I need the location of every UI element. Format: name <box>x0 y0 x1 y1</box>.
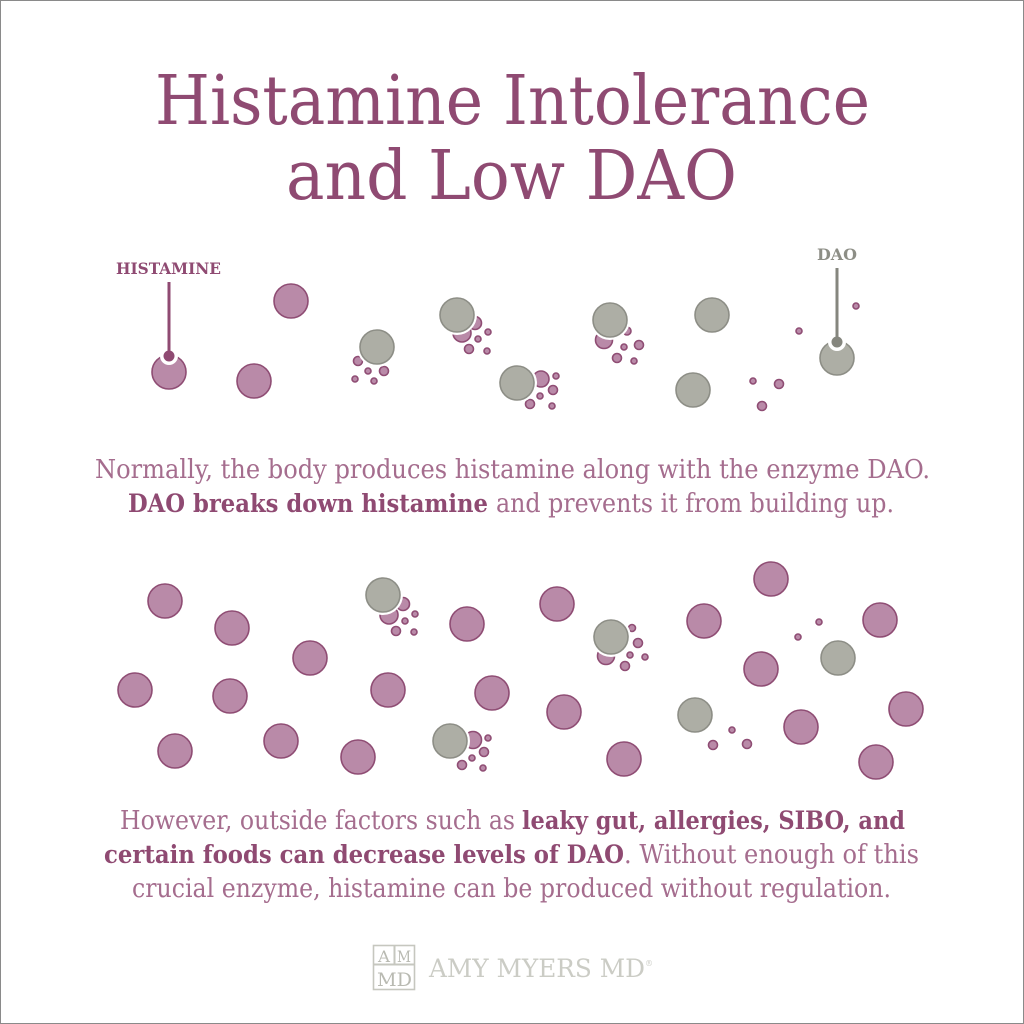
DAO molecules and histamine fragments <box>678 619 855 750</box>
DAO breaking down histamine 2 <box>437 295 491 354</box>
text block: normal DAO function: and prevents it from building up. <box>496 489 894 519</box>
histamine molecules <box>237 284 308 398</box>
logo mark: MD <box>377 969 412 991</box>
diagram: normal histamine and DAO levels <box>116 245 859 410</box>
text block: outside factors <box>104 806 919 904</box>
text block: outside factors: leaky gut, allergies, SIBO, and <box>522 806 905 835</box>
DAO breaking down histamine 2 <box>591 617 648 670</box>
label: DAO pointer <box>817 245 857 375</box>
DAO breaking down histamine 4 <box>590 300 644 364</box>
DAO breaking down histamine 1 <box>352 327 397 384</box>
DAO breaking down histamine 3 <box>430 721 491 771</box>
text block: outside factors: certain foods can decrease levels of DAO <box>104 840 624 869</box>
label: DAO pointer: DAO <box>817 245 857 264</box>
text block: outside factors: . Without enough of this <box>624 840 919 870</box>
logo wordmark: AMY MYERS MD <box>428 954 645 983</box>
title <box>155 62 870 216</box>
text block: outside factors: crucial enzyme, histamine can be produced without regulation. <box>132 874 891 904</box>
title: and Low DAO <box>286 137 737 216</box>
diagram: low DAO and histamine build-up <box>118 562 923 779</box>
DAO breaking down histamine 3 <box>497 363 559 409</box>
text block: normal DAO function <box>95 455 930 519</box>
text block: normal DAO function: Normally, the body produces histamine along with the enzyme DAO. <box>95 455 930 485</box>
DAO breaking down histamine 1 <box>363 575 418 636</box>
text block: outside factors: However, outside factors such as <box>120 806 515 836</box>
histamine molecules <box>118 562 923 779</box>
label: histamine pointer <box>116 259 221 389</box>
DAO molecules and histamine fragments <box>676 298 859 410</box>
logo mark: A <box>377 947 390 966</box>
text block: normal DAO function: DAO breaks down histamine <box>128 489 488 518</box>
logo mark: M <box>397 947 411 966</box>
label: histamine pointer: HISTAMINE <box>116 259 221 278</box>
logo mark <box>374 946 414 991</box>
logo: Amy Myers MD <box>374 946 653 991</box>
title: Histamine Intolerance <box>155 62 870 141</box>
registered mark: ® <box>645 959 653 968</box>
